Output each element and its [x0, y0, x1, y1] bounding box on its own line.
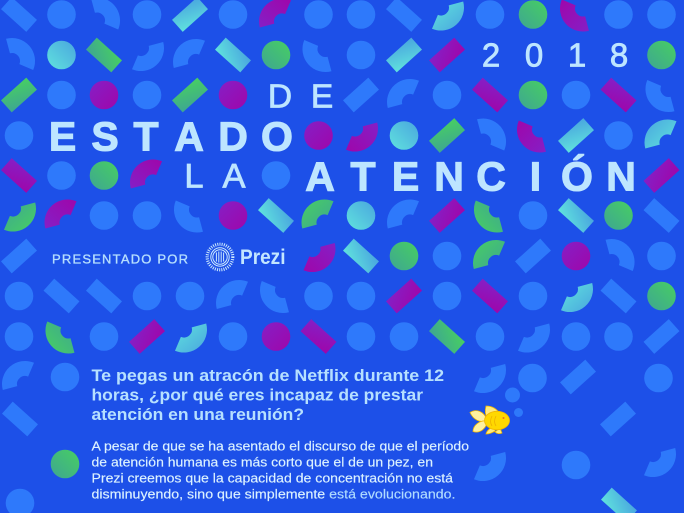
- title: ATENCIÓN: Ó: [561, 153, 593, 199]
- pattern row 9: [5, 319, 679, 354]
- body paragraph: A pesar de que se ha asentado el discurso de que el período: [92, 439, 469, 454]
- title: ESTADO: [49, 113, 293, 159]
- heading question: [92, 367, 444, 424]
- fish eye: [502, 417, 504, 419]
- fish tail upper: [470, 411, 487, 421]
- title: DE: [268, 78, 333, 116]
- year 2018: 0: [525, 36, 543, 74]
- heading question: Te pegas un atracón de Netflix durante 12: [92, 367, 444, 385]
- Prezi logo: [207, 244, 286, 270]
- title: DE: D: [268, 78, 292, 116]
- pattern row 5: [1, 158, 679, 193]
- title: ESTADO: O: [261, 113, 293, 159]
- title: ATENCIÓN: T: [350, 153, 376, 199]
- pattern row 1: [1, 0, 676, 32]
- pattern row 8: [5, 279, 676, 313]
- heading question: atención en una reunión?: [92, 406, 304, 424]
- pattern row 6: [4, 198, 679, 233]
- title: ESTADO: A: [174, 113, 204, 159]
- title: LA: L: [184, 157, 204, 195]
- Prezi wordmark: Prezi: [240, 246, 286, 269]
- icon: Prezi spiral mark: [207, 244, 233, 270]
- title: ATENCIÓN: E: [392, 153, 419, 199]
- title: ESTADO: D: [218, 113, 248, 159]
- pattern row 3: [1, 78, 674, 112]
- title: ATENCIÓN: I: [530, 153, 541, 199]
- bubbles: [505, 388, 523, 417]
- title: LA: [184, 157, 246, 195]
- pattern row 4: [5, 118, 676, 153]
- title: ATENCIÓN: C: [476, 153, 506, 199]
- body paragraph: Prezi creemos que la capacidad de concentración no está: [92, 470, 454, 486]
- year 2018: 8: [610, 36, 628, 74]
- fish scales: [490, 416, 496, 426]
- year 2018: 1: [568, 36, 586, 74]
- fish bottom fins: [486, 427, 502, 434]
- year 2018: 2: [482, 36, 500, 74]
- title: ESTADO: S: [91, 113, 119, 159]
- title: ATENCIÓN: [305, 153, 636, 199]
- title: ATENCIÓN: A: [305, 153, 335, 199]
- presented by label: PRESENTADO POR: [52, 251, 188, 266]
- body paragraph: de atención humana es más corto que el de un pez, en: [92, 455, 433, 470]
- fish tail lower: [473, 421, 487, 432]
- body paragraph: [92, 439, 469, 501]
- fish body: [484, 411, 510, 430]
- lower scattered shapes: [2, 360, 676, 513]
- year 2018: [482, 36, 628, 74]
- title: ESTADO: E: [49, 113, 76, 159]
- title: DE: E: [311, 78, 333, 116]
- title: ATENCIÓN: N: [606, 153, 636, 199]
- title: ATENCIÓN: N: [434, 153, 464, 199]
- icon: goldfish: [470, 406, 510, 434]
- body paragraph: disminuyendo, sino que simplemente está evolucionando.: [92, 486, 456, 501]
- pattern row 7: [1, 239, 676, 273]
- heading question: horas, ¿por qué eres incapaz de prestar: [92, 386, 424, 404]
- pattern row 2: [6, 38, 676, 72]
- title: LA: A: [222, 157, 246, 195]
- fish top fin: [485, 406, 500, 418]
- title: ESTADO: T: [133, 113, 159, 159]
